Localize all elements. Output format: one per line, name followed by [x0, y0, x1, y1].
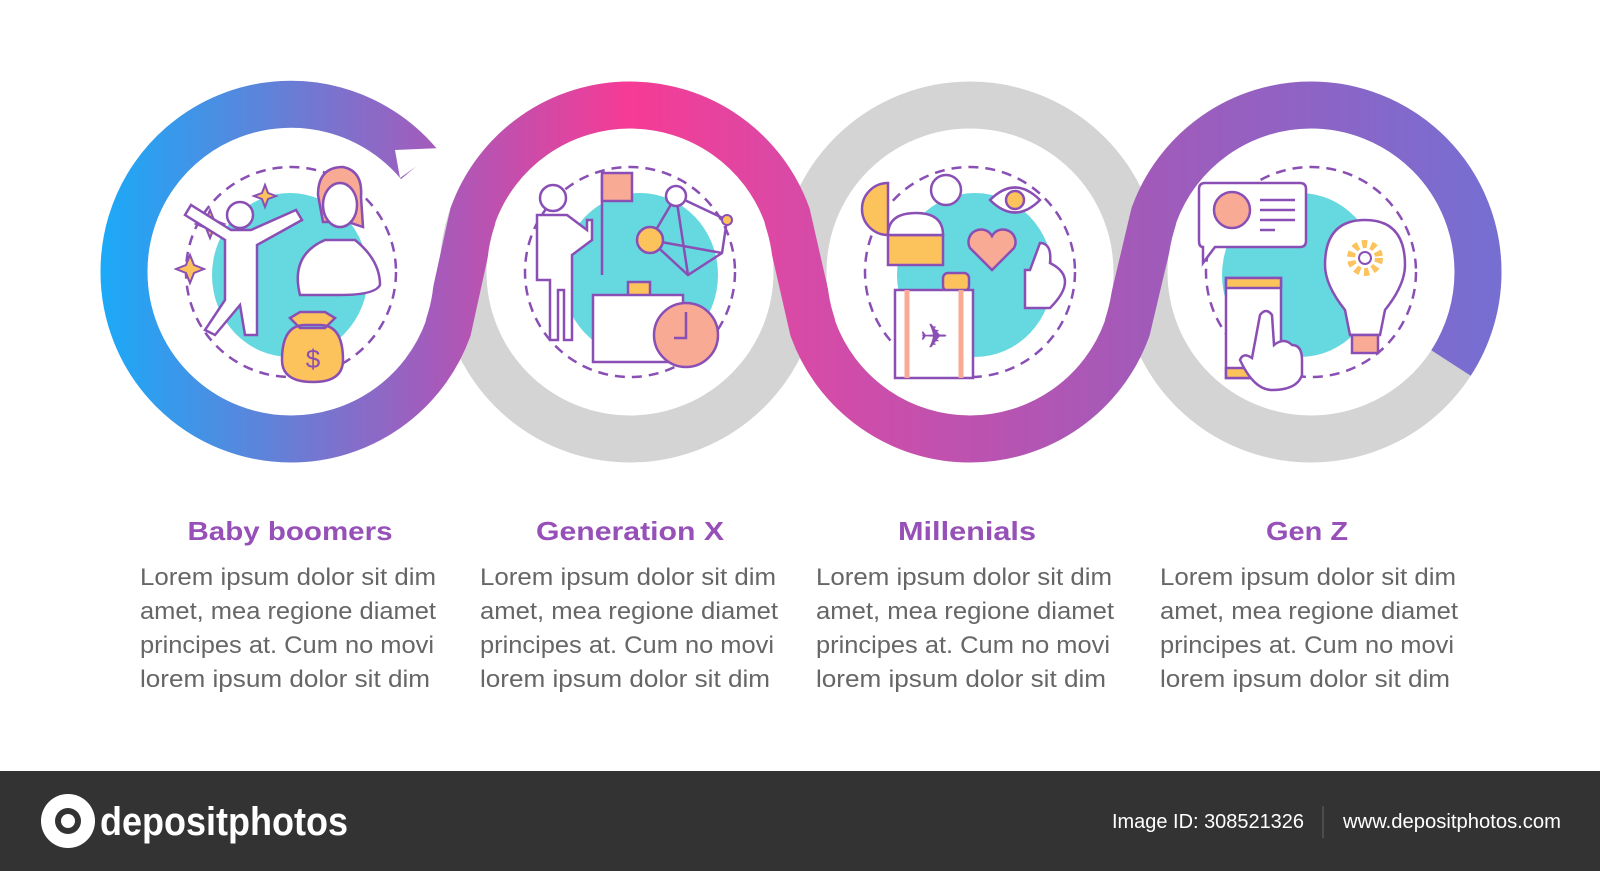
footer bar: depositphotos	[100, 800, 348, 844]
panel icon: baby boomers	[148, 129, 434, 415]
text block: gen z: principes at. Cum no movi	[1160, 632, 1454, 659]
title: baby boomers: Baby boomers	[188, 516, 392, 546]
text block: gen z	[1160, 564, 1458, 693]
panel icon: generation x	[487, 129, 773, 415]
text block: millenials: amet, mea regione diamet	[816, 598, 1114, 625]
text block: baby boomers	[140, 564, 436, 693]
text block: baby boomers: amet, mea regione diamet	[140, 598, 436, 625]
text block: baby boomers: Lorem ipsum dolor sit dim	[140, 564, 436, 591]
text block: millenials: Lorem ipsum dolor sit dim	[816, 564, 1112, 591]
footer bar: Image ID: 308521326	[1112, 811, 1304, 833]
footer bar	[0, 771, 1600, 871]
panel icon: millenials	[827, 129, 1113, 415]
title: generation x: Generation X	[536, 516, 725, 546]
footer bar: www.depositphotos.com	[1342, 811, 1561, 833]
panel icon: gen z	[1168, 129, 1454, 415]
arrow notch at ribbon start	[395, 148, 442, 178]
icon: camera logo	[41, 794, 95, 848]
text block: generation x: lorem ipsum dolor sit dim	[480, 666, 770, 693]
text block: gen z: lorem ipsum dolor sit dim	[1160, 666, 1450, 693]
text block: generation x: principes at. Cum no movi	[480, 632, 774, 659]
text block: baby boomers: lorem ipsum dolor sit dim	[140, 666, 430, 693]
ribbon: gradient flow through four circles	[124, 104, 1478, 439]
text block: gen z: amet, mea regione diamet	[1160, 598, 1458, 625]
text block: millenials: lorem ipsum dolor sit dim	[816, 666, 1106, 693]
text block: generation x: amet, mea regione diamet	[480, 598, 778, 625]
text block: millenials: principes at. Cum no movi	[816, 632, 1110, 659]
text block: generation x: Lorem ipsum dolor sit dim	[480, 564, 776, 591]
text block: generation x	[480, 564, 778, 693]
text block: millenials	[816, 564, 1114, 693]
title: gen z: Gen Z	[1266, 516, 1348, 546]
text block: gen z: Lorem ipsum dolor sit dim	[1160, 564, 1456, 591]
title: millenials: Millenials	[898, 516, 1036, 546]
text block: baby boomers: principes at. Cum no movi	[140, 632, 434, 659]
grey rings	[463, 105, 1478, 439]
panel icon: millenials: ✈	[920, 318, 948, 356]
panel icon: baby boomers: $	[306, 344, 321, 374]
